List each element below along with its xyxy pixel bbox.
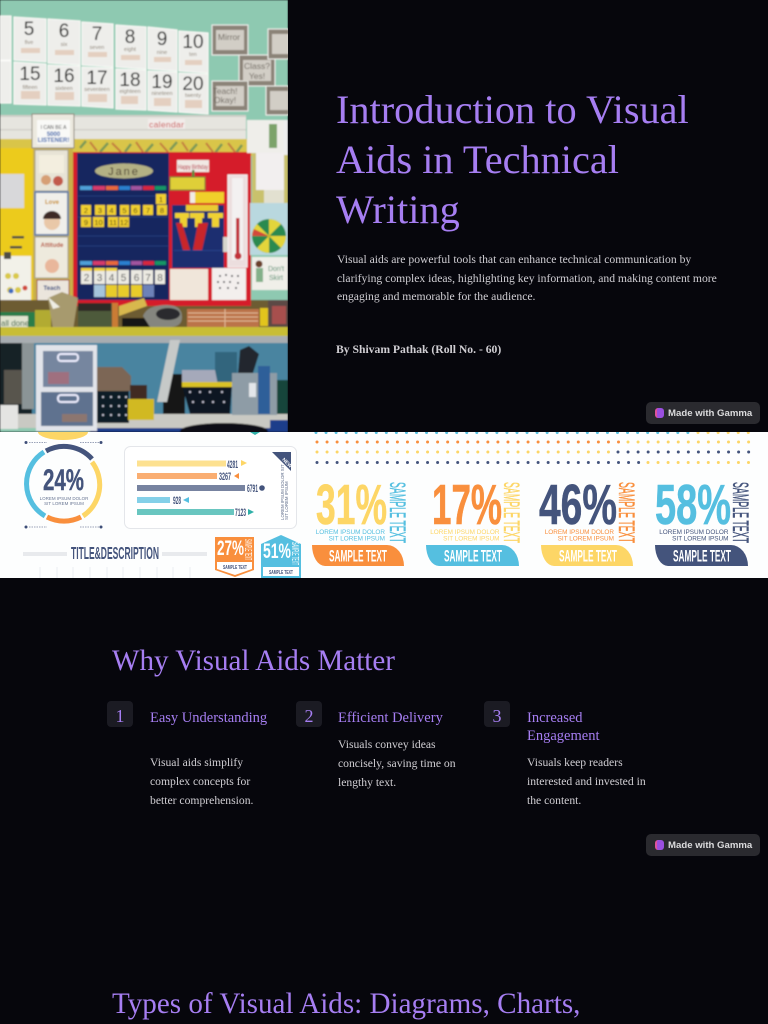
- stat 31%: SIT LOREM IPSUM: [329, 536, 385, 542]
- intro paragraph: clarifying complex ideas, highlighting key information, and making content more: [337, 272, 717, 284]
- listener sign: [32, 114, 74, 148]
- stat 46%: 46%: [539, 473, 617, 537]
- navy pocket chart: 6: [133, 206, 138, 215]
- number cards: sixteen: [55, 86, 73, 92]
- bar panel: [124, 446, 296, 528]
- plastic drawers: [36, 345, 97, 431]
- item 3 title: Engagement: [527, 728, 599, 744]
- item 1 title: Easy Understanding: [150, 710, 267, 726]
- navy pocket chart: 9: [84, 218, 88, 227]
- stat 58%: SIT LOREM IPSUM: [672, 536, 728, 542]
- number cards: nineteen: [151, 91, 173, 97]
- navy pocket chart: 10: [94, 218, 103, 227]
- number cards: 6: [59, 21, 69, 42]
- navy pocket chart: [77, 153, 169, 303]
- number cards: seven: [90, 45, 104, 51]
- molding and calendar label: [0, 115, 246, 144]
- navy pocket chart: 7: [146, 206, 150, 215]
- author line: By Shivam Pathak (Roll No. - 60): [336, 343, 501, 356]
- number cards: nine: [157, 50, 167, 56]
- number cards: [0, 16, 208, 114]
- navy pocket chart: 8: [160, 206, 164, 215]
- paper and calendar sheet: [170, 268, 246, 308]
- ring chart 24%: LOREM IPSUM DOLOR: [40, 496, 89, 501]
- item 3: increased engagement: [484, 701, 646, 807]
- stat 17%: 17%: [432, 473, 502, 537]
- number 3: [484, 701, 510, 727]
- stat 46%: LOREM IPSUM DOLOR: [545, 529, 614, 536]
- right side papers: [247, 120, 288, 255]
- navy pocket chart: 6: [134, 273, 140, 284]
- dot rows: [316, 432, 750, 462]
- navy pocket chart: 11: [109, 218, 117, 227]
- badge 51%: SAMPLE TEXT: [269, 570, 293, 576]
- item 3 text: [527, 756, 646, 807]
- badge 27%: SAMPLE TEXT: [223, 565, 247, 571]
- navy pocket chart: 7: [145, 273, 151, 284]
- number 2: [296, 701, 322, 727]
- number cards: 10: [182, 32, 204, 53]
- item 3 title: Increased: [527, 710, 583, 726]
- number cards: 19: [151, 72, 173, 93]
- item 2 title: Efficient Delivery: [338, 710, 443, 726]
- number cards: twenty: [185, 93, 201, 99]
- stat 17%: SAMPLE TEXT: [444, 548, 502, 566]
- ring chart 24%: [24, 432, 102, 528]
- poster column: Teach: [44, 286, 61, 292]
- wall signs: Mirror: [218, 32, 240, 42]
- stat 58%: [655, 473, 753, 566]
- stat 46%: SIT LOREM IPSUM: [558, 536, 614, 542]
- badge 51%: 51%: [263, 540, 291, 563]
- red board: [73, 152, 251, 306]
- heading: types of visual aids: Types of Visual Aids: Diagrams, Charts,: [112, 988, 580, 1020]
- wall signs: Class?: [244, 61, 270, 71]
- storage boxes: [97, 346, 288, 423]
- poster column: Love: [45, 200, 60, 206]
- ring chart 24%: 24%: [43, 464, 84, 497]
- item 2 text: concisely, saving time on: [338, 757, 456, 770]
- item 2 text: lengthy text.: [338, 776, 396, 789]
- stat 17%: [426, 473, 524, 566]
- intro paragraph: [337, 253, 717, 303]
- number cards: eighteen: [119, 89, 141, 95]
- title: Introduction to Visual: [336, 87, 689, 132]
- stat 46%: SAMPLE TEXT: [559, 548, 617, 566]
- listener sign: I CAN BE A: [41, 125, 67, 131]
- poster column: Attitude: [41, 243, 64, 249]
- stat 31%: 31%: [316, 473, 387, 537]
- navy pocket chart: 8: [157, 273, 163, 284]
- birthday chart: [170, 160, 235, 268]
- bar panel: 4281: [227, 459, 238, 471]
- intro paragraph: Visual aids are powerful tools that can enhance technical communication by: [337, 253, 691, 266]
- heading: why visual aids matter: Why Visual Aids Matter: [112, 645, 395, 677]
- stat 17%: LOREM IPSUM DOLOR: [430, 529, 500, 536]
- navy pocket chart: 4: [109, 206, 114, 215]
- title: Writing: [336, 187, 460, 232]
- number cards: fifteen: [23, 85, 37, 91]
- item 2 text: Visuals convey ideas: [338, 738, 436, 751]
- number cards: 9: [157, 29, 167, 50]
- molding and calendar label: calendar: [149, 120, 184, 130]
- navy pocket chart: Jane: [108, 166, 140, 178]
- teal marker: [250, 432, 260, 435]
- item 1 text: complex concepts for: [150, 775, 250, 788]
- navy pocket chart: 5: [121, 273, 127, 284]
- stat 58%: 58%: [655, 473, 731, 537]
- number cards: five: [25, 40, 33, 46]
- bar panel: 7123: [235, 507, 246, 519]
- listener sign: LISTENER!: [38, 138, 69, 144]
- item 3 text: Visuals keep readers: [527, 756, 623, 769]
- item 1: easy understanding: [107, 701, 267, 807]
- navy pocket chart: 4: [109, 273, 115, 284]
- photo: classroom calendar wall: [0, 0, 288, 432]
- number cards: 20: [182, 74, 204, 95]
- badge: made with gamma second: [646, 834, 760, 856]
- badge: made with gamma: Made with Gamma: [668, 408, 752, 419]
- item 1 text: better comprehension.: [150, 794, 253, 807]
- title: [336, 87, 689, 232]
- skirt paper: Skirt: [269, 275, 283, 282]
- wall signs: [212, 25, 292, 115]
- bar panel: 928: [173, 495, 181, 507]
- stat 58%: LOREM IPSUM DOLOR: [659, 529, 729, 536]
- number cards: 15: [19, 64, 41, 85]
- navy pocket chart: 3: [98, 206, 102, 215]
- bar panel: 3267: [219, 471, 231, 483]
- item 2: efficient delivery: [296, 701, 456, 789]
- navy pocket chart: 1: [159, 195, 163, 204]
- item 3 title: [527, 710, 600, 744]
- badge: made with gamma: [646, 402, 760, 424]
- number cards: six: [61, 42, 68, 48]
- wall signs: Okay!: [214, 95, 236, 105]
- poster column: [35, 150, 69, 306]
- skirt paper: [252, 257, 288, 290]
- item 2 text: [338, 738, 456, 789]
- navy pocket chart: 2: [84, 273, 90, 284]
- number cards: ten: [189, 52, 197, 58]
- navy pocket chart: 3: [97, 273, 103, 284]
- number cards: 18: [119, 70, 141, 91]
- stat 31%: [312, 473, 410, 566]
- number 2: 2: [304, 706, 314, 726]
- shelf with supplies: all done: [1, 319, 30, 328]
- item 3 text: interested and invested in: [527, 775, 646, 788]
- shelf board: [0, 327, 288, 343]
- shelf with supplies: [0, 292, 288, 330]
- intro paragraph: engaging and memorable for the audience.: [337, 290, 535, 303]
- bar panel: LOREM IPSUM DOLOR SIT: [280, 464, 285, 520]
- navy pocket chart: 5: [122, 206, 127, 215]
- badge 51%: [261, 535, 301, 578]
- bar panel: SIT LOREM IPSUM: [284, 481, 289, 520]
- navy pocket chart: 2: [84, 206, 88, 215]
- number cards: 8: [125, 27, 135, 48]
- bar panel: 6791: [247, 483, 258, 495]
- stat 31%: SAMPLE TEXT: [329, 548, 387, 566]
- badge: made with gamma second: Made with Gamma: [668, 840, 752, 851]
- item 1 text: [150, 756, 253, 807]
- number cards: seventeen: [84, 87, 110, 93]
- infographic strip: [0, 432, 768, 578]
- item 1 text: Visual aids simplify: [150, 756, 243, 769]
- lower cubby: [0, 340, 288, 439]
- wall signs: Teach!: [212, 86, 238, 96]
- border and yellow board: [0, 139, 252, 328]
- number cards: 7: [92, 24, 102, 45]
- number 3: 3: [492, 706, 502, 726]
- stat 31%: LOREM IPSUM DOLOR: [316, 529, 385, 536]
- stat 46%: [539, 473, 639, 566]
- navy pocket chart: 12: [120, 218, 128, 227]
- skirt paper: Don't: [268, 266, 284, 273]
- number cards: eight: [124, 47, 136, 53]
- item 3 text: the content.: [527, 794, 581, 807]
- thermometer: [228, 175, 247, 267]
- wall signs: Yes!: [249, 71, 265, 81]
- badge 27%: [215, 537, 254, 577]
- number cards: 5: [24, 19, 34, 40]
- badge 27%: 27%: [217, 537, 244, 560]
- ring chart 24%: SIT LOREM IPSUM: [44, 501, 84, 506]
- birthday chart: Happy Birthday: [178, 165, 208, 171]
- number 1: [107, 701, 133, 727]
- number cards: 17: [86, 68, 108, 89]
- title and description: [23, 543, 207, 578]
- number cards: 16: [53, 66, 75, 87]
- spinner wheel: [252, 219, 286, 253]
- title: Aids in Technical: [336, 137, 619, 182]
- title and description: TITLE&DESCRIPTION: [71, 543, 159, 563]
- stat 17%: SIT LOREM IPSUM: [443, 536, 500, 542]
- listener sign: 5000: [47, 132, 61, 138]
- number 1: 1: [116, 706, 124, 726]
- bar panel: NEW: [280, 457, 293, 470]
